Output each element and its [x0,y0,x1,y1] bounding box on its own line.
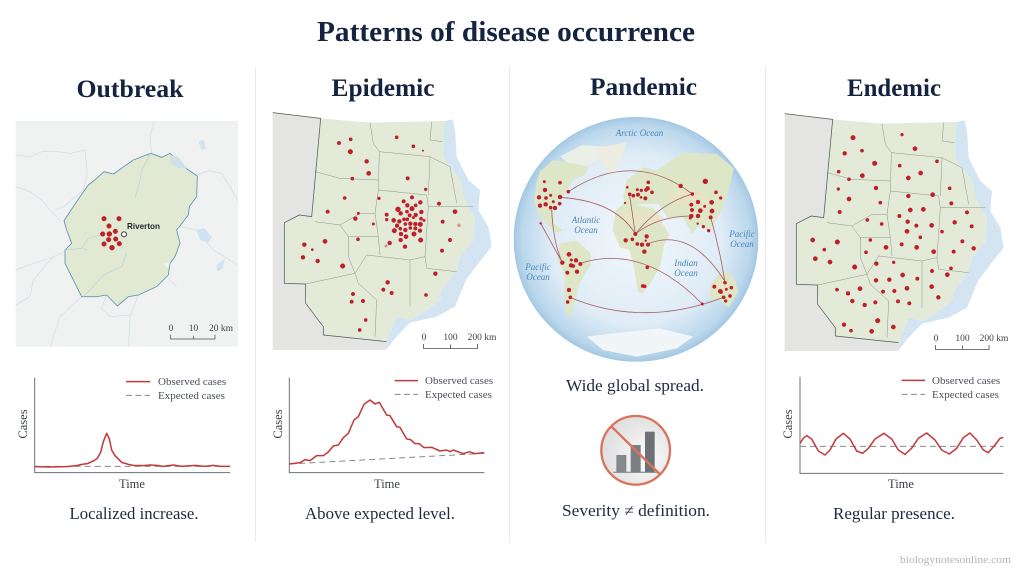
ocean labels: Indian [673,258,698,268]
watermark: biologynotesonline.com [900,554,1011,566]
ocean labels: Ocean [574,225,598,235]
chart: endemic line chart: Time [888,477,914,491]
ocean labels: Ocean [730,239,754,249]
ocean labels: Pacific [524,262,551,272]
chart: epidemic line chart: Time [374,477,400,491]
chart: epidemic line chart: Cases [271,409,285,439]
divider [508,67,510,542]
ocean labels: Ocean [526,272,550,282]
map: epidemic clustered cases: 0 [422,333,427,343]
panel: epidemic [271,73,497,523]
ocean labels: Ocean [674,268,698,278]
caption: endemic: Regular presence. [833,504,955,523]
heading: Outbreak: Outbreak [76,74,184,103]
caption: severity is not definition: Severity ≠ definition. [562,501,710,520]
caption: outbreak: Localized increase. [70,504,198,523]
title: Patterns of disease occurrence [317,16,695,48]
map: endemic evenly spread cases: 200 km [980,334,1009,344]
map: epidemic clustered cases [273,113,497,350]
divider [254,67,256,542]
chart: epidemic line chart: Expected cases [425,389,492,401]
chart: outbreak line chart: Expected cases [158,390,225,402]
chart: outbreak line chart: Observed cases [158,376,226,388]
chart: outbreak line chart: Cases [16,409,30,439]
map: epidemic clustered cases: 200 km [468,333,497,343]
chart: endemic line chart: Observed cases [932,375,1000,387]
heading: Epidemic: Epidemic [332,73,434,102]
globe map with spread arcs [514,117,758,361]
chart: outbreak line chart [16,376,230,491]
map: endemic evenly spread cases: 0 [934,334,939,344]
chart: endemic line chart [781,375,1003,491]
scale bar labels: 20 km [209,324,234,334]
caption: epidemic: Above expected level. [305,504,455,523]
heading: Endemic: Endemic [847,73,941,102]
scale bar labels: 10 [189,324,198,334]
panel: pandemic [514,72,758,520]
caption: wide global spread: Wide global spread. [566,376,704,395]
ocean labels: Atlantic [571,215,600,225]
chart: epidemic line chart [271,375,493,491]
map: epidemic clustered cases: 100 [443,333,458,343]
heading: Pandemic: Pandemic [590,72,697,101]
map: endemic evenly spread cases: 100 [955,334,970,344]
map: outbreak region [16,121,238,347]
ocean labels [524,128,755,282]
chart: endemic line chart: Cases [781,409,795,439]
chart: epidemic line chart: Observed cases [425,375,493,387]
chart: outbreak line chart: Time [119,477,145,491]
scale bar labels [169,324,234,334]
label: Riverton: Riverton [127,221,160,231]
divider [764,67,766,542]
ocean labels: Arctic Ocean [615,128,664,138]
chart: endemic line chart: Expected cases [932,389,999,401]
icon: crossed-out severity bars [601,416,670,485]
panel: outbreak [16,74,238,523]
panel: endemic [781,73,1009,523]
scale bar labels: 0 [169,324,174,334]
map: endemic evenly spread cases [785,114,1009,351]
ocean labels: Pacific [728,229,755,239]
